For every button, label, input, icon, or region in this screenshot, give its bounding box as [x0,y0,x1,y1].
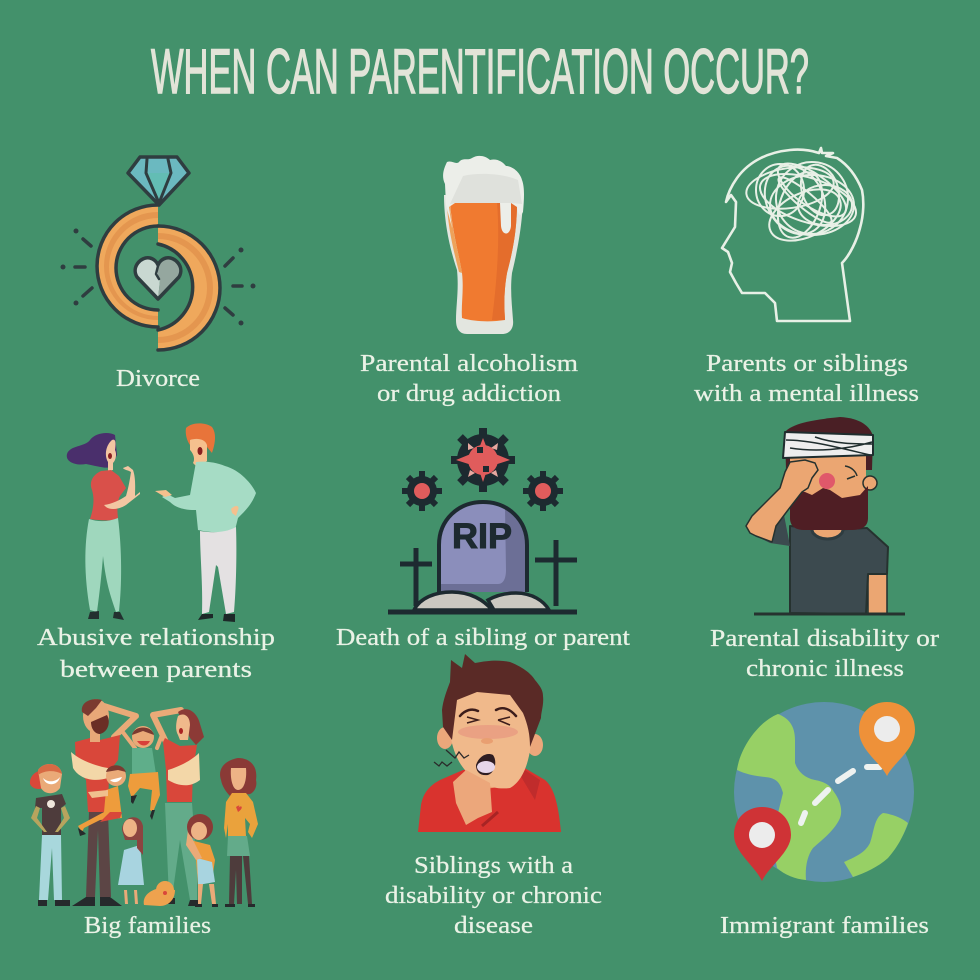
panel: abusive relationship [37,423,275,683]
label: abusive relationship: between parents [60,657,252,683]
icon: broken diamond ring [60,157,256,350]
label: sibling disability: disability or chronic [385,883,602,909]
label: sibling disability: Siblings with a [414,853,573,879]
figure: child held by father [78,765,126,836]
panel: immigrant families [720,702,929,939]
panel: divorce [60,157,256,392]
icon: beer glass [443,156,524,334]
icon: arguing couple [67,423,256,622]
label: mental illness: Parents or siblings [706,351,908,377]
panel: alcoholism [360,156,578,407]
figure: baby / puppy [144,881,175,906]
figure: boy in overalls [186,814,218,907]
panel: sibling disability [385,654,602,939]
panel: mental illness [694,148,919,407]
figure: father [71,699,136,906]
label: alcoholism: Parental alcoholism [360,351,578,377]
panel: parental disability [710,417,939,682]
figure: right teen girl [220,758,258,907]
label: abusive relationship [37,625,275,683]
label: abusive relationship: Abusive relationship [37,625,275,651]
icon: injured man with bandage [746,417,905,614]
label: sibling disability [385,853,602,939]
icon: orange pin [859,702,915,776]
icon: gravestone with viruses [388,428,577,612]
label: parental disability [710,626,939,682]
icon: red pin [734,807,791,881]
label: mental illness [694,351,919,407]
label: big families: Big families [84,913,211,939]
figure: girl in blue dress [118,817,144,904]
figure: left teen [30,764,70,906]
panel: big families [30,699,258,939]
label: alcoholism: or drug addiction [377,381,561,407]
label: parental disability: Parental disability or [710,626,939,652]
label: divorce: Divorce [116,366,200,392]
label: alcoholism [360,351,578,407]
icon: head with scribbled brain [722,148,863,321]
label: mental illness: with a mental illness [694,381,919,407]
label: immigrant families: Immigrant families [720,913,929,939]
label: sibling disability: disease [454,913,533,939]
figure: child on top [122,726,162,820]
icon: sick boy holding throat [418,654,561,832]
figure: mother [153,709,204,906]
icon: crowd of family members [30,699,258,907]
icon: globe with map pins [734,702,915,882]
panel: death [336,428,630,651]
label: parental disability: chronic illness [746,656,904,682]
label: death: Death of a sibling or parent [336,625,630,651]
text: RIP carved on stone: RIP [452,517,512,556]
